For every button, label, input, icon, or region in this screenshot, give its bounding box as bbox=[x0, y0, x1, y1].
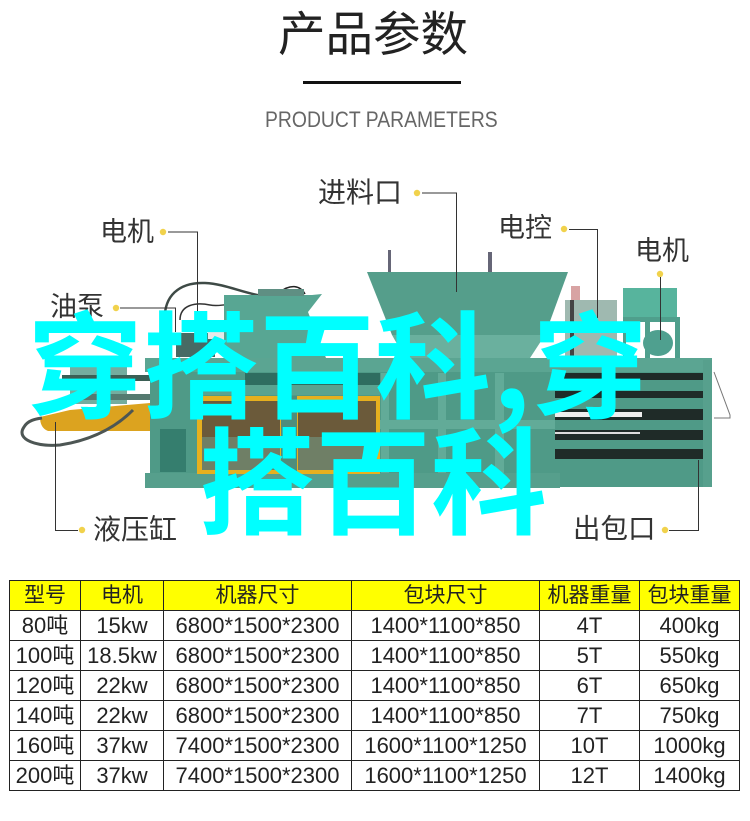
motor housing bbox=[224, 294, 326, 358]
machine bbox=[22, 250, 730, 488]
row: 120 ton: 22kw bbox=[96, 673, 148, 698]
callout: hydraulic cylinder: 液压缸 bbox=[93, 514, 177, 545]
callout: feed inlet: 进料口 bbox=[318, 177, 402, 208]
row: 160 ton: 37kw bbox=[96, 733, 148, 758]
row: 80 ton: 15kw bbox=[96, 613, 148, 638]
row: 100 ton: 18.5kw bbox=[87, 643, 157, 668]
row: 80 ton: 4T bbox=[577, 613, 602, 638]
row: 140 ton bbox=[16, 703, 719, 728]
table header row: 机器尺寸 bbox=[216, 584, 300, 607]
row: 80 ton: 6800*1500*2300 bbox=[176, 613, 339, 638]
row: 200 ton: 37kw bbox=[96, 763, 148, 788]
row: 140 ton: 7T bbox=[577, 703, 602, 728]
row: 140 ton: 1400*1100*850 bbox=[370, 703, 521, 728]
right motor frame bbox=[623, 288, 677, 317]
table header row: 包块尺寸 bbox=[404, 584, 488, 607]
callout: oil pump bbox=[50, 292, 176, 332]
parameter table bbox=[9, 580, 740, 791]
yellow doors bbox=[197, 396, 380, 474]
row: 200 ton: 200吨 bbox=[16, 763, 74, 788]
left access panel bbox=[160, 429, 186, 472]
row: 100 ton: 5T bbox=[577, 643, 602, 668]
base plate bbox=[145, 473, 560, 488]
title underline bbox=[303, 81, 461, 84]
diagram: baler machine with callouts bbox=[20, 177, 730, 545]
row: 140 ton: 6800*1500*2300 bbox=[176, 703, 339, 728]
row: 80 ton: 400kg bbox=[660, 613, 719, 638]
row: 200 ton: 7400*1500*2300 bbox=[176, 763, 339, 788]
row: 100 ton: 100吨 bbox=[16, 643, 74, 668]
hydraulic hose bbox=[22, 410, 133, 445]
callout: bale outlet bbox=[573, 460, 698, 544]
callout: motor left: 电机 bbox=[100, 217, 154, 247]
row: 200 ton: 1600*1100*1250 bbox=[364, 763, 527, 788]
table header row: 电机 bbox=[101, 584, 143, 607]
hydraulic cylinder bbox=[40, 403, 150, 431]
row: 80 ton: 80吨 bbox=[22, 613, 68, 638]
table header row: 机器重量 bbox=[548, 584, 632, 607]
rear wire frame bbox=[714, 372, 730, 418]
callout: electric control: 电控 bbox=[498, 213, 552, 243]
hose bbox=[165, 283, 262, 325]
row: 120 ton bbox=[16, 673, 719, 698]
row: 200 ton bbox=[16, 763, 726, 788]
callout: hydraulic cylinder bbox=[56, 422, 177, 545]
row: 120 ton: 6T bbox=[577, 673, 602, 698]
row: 160 ton: 160吨 bbox=[16, 733, 74, 758]
callout: electric control bbox=[498, 213, 598, 318]
callout: motor left bbox=[100, 217, 198, 312]
row: 120 ton: 1400*1100*850 bbox=[370, 673, 521, 698]
overlay text line 1: , bbox=[493, 275, 530, 443]
subtitle: PRODUCT PARAMETERS bbox=[265, 107, 498, 132]
row: 100 ton: 550kg bbox=[660, 643, 719, 668]
row: 80 ton bbox=[22, 613, 719, 638]
row: 140 ton: 22kw bbox=[96, 703, 148, 728]
callout: oil pump: 油泵 bbox=[50, 292, 104, 322]
side ribs bbox=[380, 373, 555, 473]
callout: bale outlet: 出包口 bbox=[573, 513, 656, 544]
discharge louvres bbox=[555, 360, 712, 487]
row: 160 ton: 1600*1100*1250 bbox=[364, 733, 527, 758]
pump assembly bbox=[176, 333, 215, 357]
row: 160 ton bbox=[16, 733, 726, 758]
hopper bbox=[367, 272, 568, 335]
row: 160 ton: 1000kg bbox=[653, 733, 726, 758]
row: 80 ton: 1400*1100*850 bbox=[370, 613, 521, 638]
row: 120 ton: 120吨 bbox=[16, 673, 74, 698]
row: 160 ton: 7400*1500*2300 bbox=[176, 733, 339, 758]
row: 100 ton: 1400*1100*850 bbox=[370, 643, 521, 668]
row: 160 ton: 10T bbox=[571, 733, 608, 758]
callout: motor right: 电机 bbox=[635, 236, 689, 266]
callout: motor right bbox=[635, 236, 689, 340]
overlay text line 1: 穿搭百科 穿 bbox=[27, 275, 648, 443]
callout: feed inlet bbox=[318, 177, 456, 292]
row: 200 ton: 12T bbox=[571, 763, 608, 788]
title: 产品参数 bbox=[278, 9, 468, 62]
overlay text line 2: 搭百科 bbox=[199, 391, 547, 559]
row: 120 ton: 650kg bbox=[660, 673, 719, 698]
electric cabinet bbox=[565, 300, 617, 358]
row: 200 ton: 1400kg bbox=[653, 763, 726, 788]
row: 100 ton bbox=[16, 643, 719, 668]
main body bbox=[150, 358, 712, 487]
table header row: 包块重量 bbox=[648, 584, 732, 607]
row: 140 ton: 750kg bbox=[660, 703, 719, 728]
table header row: 型号 bbox=[24, 584, 66, 607]
row: 100 ton: 6800*1500*2300 bbox=[176, 643, 339, 668]
table header row bbox=[10, 581, 739, 788]
left rear cylinder bbox=[70, 366, 127, 404]
row: 140 ton: 140吨 bbox=[16, 703, 74, 728]
row: 120 ton: 6800*1500*2300 bbox=[176, 673, 339, 698]
